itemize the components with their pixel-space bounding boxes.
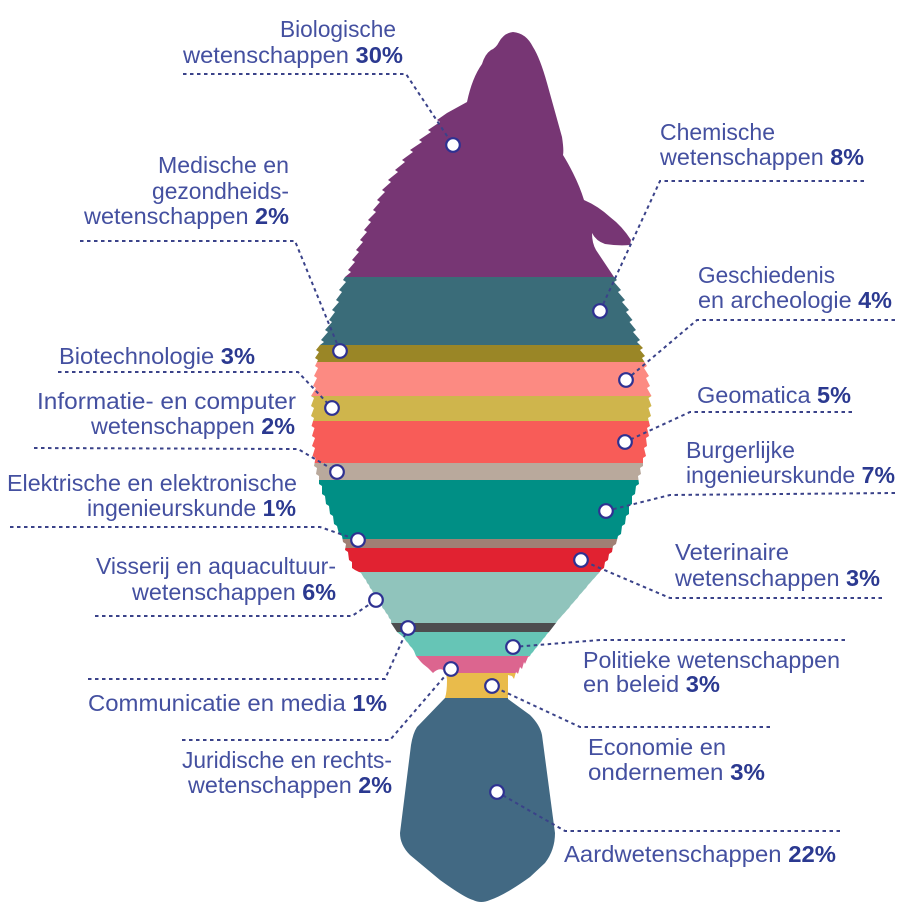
label: geschiedenis en archeologie — [698, 262, 892, 313]
label: politieke wetenschappen en beleid — [583, 647, 840, 697]
label: medische en gezondheidswetenschappen — [83, 152, 289, 229]
label: aardwetenschappen: Aardwetenschappen 22% — [564, 841, 836, 867]
label: biotechnologie: Biotechnologie 3% — [59, 343, 255, 369]
label: informatie- en computerwetenschappen — [37, 388, 296, 439]
label: politieke wetenschappen en beleid: Politieke wetenschappen — [583, 647, 840, 673]
label: burgerlijke ingenieurskunde: Burgerlijke — [686, 437, 795, 463]
label: burgerlijke ingenieurskunde: ingenieurskunde 7% — [686, 462, 895, 488]
label: elektrische en elektronische ingenieurskunde: Elektrische en elektronische — [7, 470, 297, 496]
label: visserij en aquacultuurwetenschappen: wetenschappen 6% — [131, 579, 336, 605]
band: juridische en rechtswetenschappen — [416, 656, 530, 673]
label: geschiedenis en archeologie: en archeologie 4% — [698, 287, 892, 313]
label: economie en ondernemen: ondernemen 3% — [588, 759, 765, 785]
label: geomatica: Geomatica 5% — [697, 382, 851, 408]
label: elektrische en elektronische ingenieurskunde — [7, 470, 297, 521]
band: medische en gezondheidswetenschappen — [315, 345, 645, 362]
label: economie en ondernemen — [588, 734, 765, 785]
label: juridische en rechtswetenschappen: Juridische en rechts- — [182, 747, 392, 773]
label: chemische wetenschappen: wetenschappen 8% — [659, 144, 864, 170]
band: burgerlijke ingenieurskunde — [319, 480, 639, 539]
label: visserij en aquacultuurwetenschappen — [96, 553, 336, 605]
label: chemische wetenschappen: Chemische — [660, 119, 775, 145]
band: elektrische en elektronische ingenieurskunde — [342, 539, 618, 548]
band: geomatica — [312, 421, 650, 463]
band: aardwetenschappen — [400, 698, 555, 902]
label: juridische en rechtswetenschappen — [182, 747, 392, 798]
label: medische en gezondheidswetenschappen: Medische en — [158, 152, 289, 178]
label: biologische wetenschappen — [182, 16, 403, 68]
band: biotechnologie — [311, 396, 652, 421]
band: chemische wetenschappen — [320, 277, 640, 345]
label: veterinaire wetenschappen: wetenschappen 3% — [674, 565, 880, 591]
label: geschiedenis en archeologie: Geschiedenis — [698, 262, 835, 288]
label: communicatie en media: Communicatie en media 1% — [88, 690, 387, 716]
band: geschiedenis en archeologie — [311, 362, 652, 396]
label: medische en gezondheidswetenschappen: gezondheids- — [152, 178, 289, 204]
label: burgerlijke ingenieurskunde — [686, 437, 895, 488]
label: elektrische en elektronische ingenieurskunde: ingenieurskunde 1% — [87, 495, 296, 521]
label: informatie- en computerwetenschappen: wetenschappen 2% — [90, 413, 295, 439]
band: biologische wetenschappen — [345, 32, 631, 277]
label: informatie- en computerwetenschappen: Informatie- en computer — [37, 388, 296, 414]
band: economie en ondernemen — [445, 673, 518, 698]
label: visserij en aquacultuurwetenschappen: Visserij en aquacultuur- — [96, 553, 336, 579]
band: politieke wetenschappen — [397, 632, 549, 656]
label: veterinaire wetenschappen — [674, 539, 880, 591]
label: biologische wetenschappen: Biologische — [280, 16, 396, 42]
band: communicatie en media — [391, 623, 556, 632]
label: chemische wetenschappen — [659, 119, 864, 170]
label: biologische wetenschappen: wetenschappen 30% — [182, 42, 403, 68]
label: veterinaire wetenschappen: Veterinaire — [675, 539, 789, 565]
marker dots — [325, 138, 633, 799]
label: medische en gezondheidswetenschappen: wetenschappen 2% — [83, 203, 289, 229]
label: juridische en rechtswetenschappen: wetenschappen 2% — [187, 772, 392, 798]
diagram: fish-shaped stacked bands — [311, 32, 652, 902]
band: informatie- en computerwetenschappen — [314, 463, 643, 480]
band: veterinaire wetenschappen — [345, 548, 613, 572]
label: economie en ondernemen: Economie en — [588, 734, 726, 760]
label: politieke wetenschappen en beleid: en beleid 3% — [583, 671, 720, 697]
band: visserij en aquacultuurwetenschappen — [359, 572, 600, 623]
